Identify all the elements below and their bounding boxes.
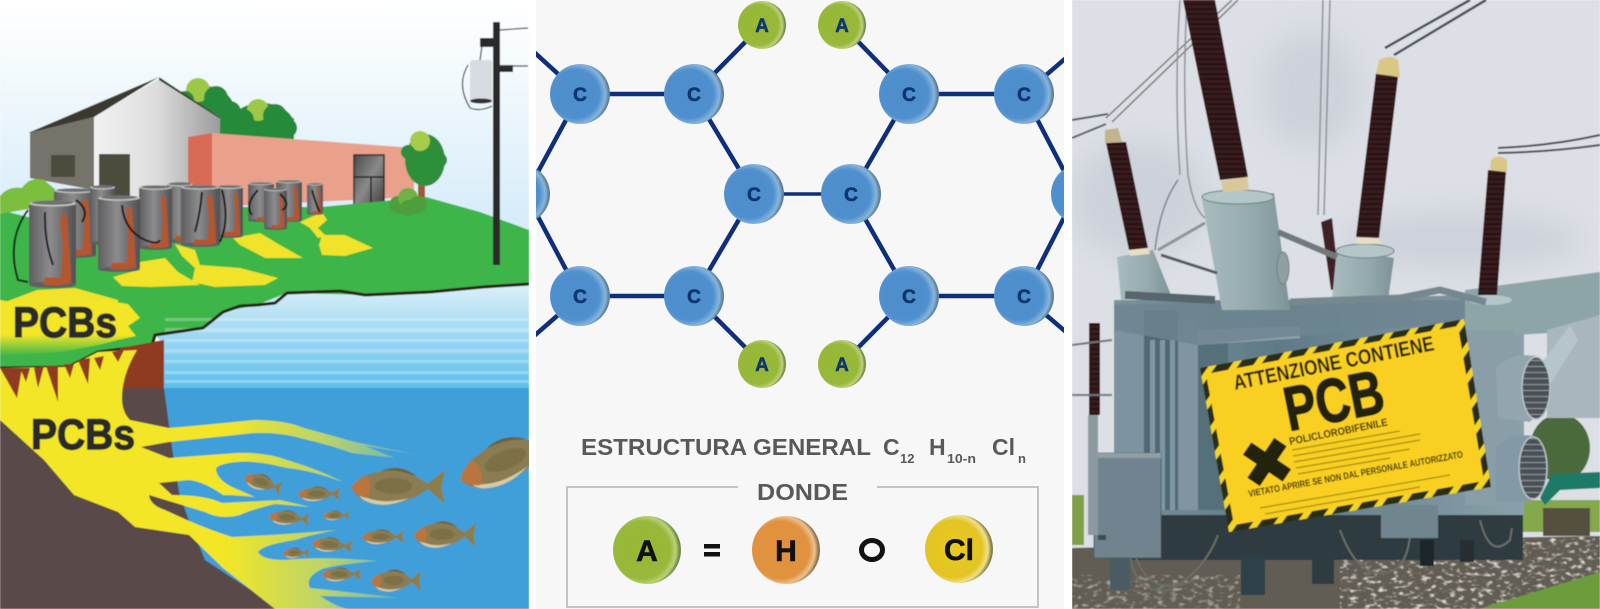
general formula heading bbox=[582, 438, 1026, 463]
general formula heading: Cl bbox=[992, 434, 1015, 460]
carbon atoms: C bbox=[687, 85, 701, 106]
carbon atoms: C bbox=[1017, 85, 1031, 106]
general formula heading: 12 bbox=[900, 451, 914, 466]
panel: transformer photo with warning sign bbox=[1070, 0, 1600, 609]
general formula heading: H bbox=[929, 434, 946, 460]
gravel ground bbox=[1072, 495, 1600, 609]
substituent atoms A bbox=[738, 1, 866, 388]
carbon atoms: C bbox=[902, 287, 916, 308]
pipes and fittings bbox=[1125, 223, 1486, 302]
carbon atoms: C bbox=[1017, 287, 1031, 308]
transformer underside and feet bbox=[1130, 514, 1524, 596]
carbon atoms: C bbox=[747, 185, 761, 206]
utility pole with transformer bbox=[462, 22, 528, 265]
grass strip bbox=[1479, 572, 1600, 609]
right tree bbox=[401, 131, 447, 198]
pink building bbox=[188, 133, 414, 207]
sign fine print bbox=[1260, 431, 1450, 514]
panel: molecular structure diagram bbox=[536, 1, 1064, 608]
substituent atoms A: A bbox=[835, 16, 849, 37]
bushing caps bbox=[1105, 57, 1507, 256]
substituent atoms A: A bbox=[755, 355, 769, 376]
water surface with stripes bbox=[155, 284, 529, 388]
tree behind bbox=[1530, 414, 1590, 482]
sign main label PCB: PCB bbox=[1278, 357, 1390, 445]
sign heading: ATTENZIONE CONTIENE bbox=[1231, 332, 1436, 395]
carbon atoms: C bbox=[687, 287, 701, 308]
warning sign bbox=[1200, 319, 1491, 532]
left insulator post bbox=[1072, 323, 1112, 535]
yellow PCB underground plume bbox=[0, 350, 419, 609]
riverbank and soil bbox=[0, 340, 280, 609]
porcelain bushings bbox=[1106, 0, 1506, 295]
yellow spills on grass bbox=[0, 212, 373, 310]
legend atoms: Cl bbox=[944, 534, 974, 567]
transformer tanks with rust bbox=[29, 180, 323, 288]
icon: hazard X bbox=[1241, 436, 1293, 488]
overhead wires bbox=[1072, 0, 1600, 250]
carbon atoms: C bbox=[573, 85, 587, 106]
cloudy sky bbox=[1072, 0, 1600, 609]
yellow PCB patch in the soil bbox=[0, 300, 140, 356]
panel: PCB contamination illustration bbox=[0, 21, 529, 609]
school of fish bbox=[244, 436, 529, 592]
sign subtitle: POLICLOROBIFENILE bbox=[1288, 417, 1389, 448]
fan radiators bbox=[1496, 325, 1578, 502]
shrub left bbox=[0, 179, 56, 214]
general formula heading: n bbox=[1018, 451, 1026, 466]
general formula heading: ESTRUCTURA GENERAL bbox=[581, 434, 871, 460]
carbon atoms bbox=[536, 64, 1064, 326]
deep water bbox=[164, 388, 529, 609]
carbon atoms: C bbox=[844, 185, 858, 206]
shrub right bbox=[389, 188, 427, 216]
tank cables bbox=[14, 190, 320, 282]
label: PCBs on land: PCBs bbox=[13, 299, 117, 347]
bonds bbox=[536, 40, 1064, 349]
general formula heading: C bbox=[883, 434, 900, 460]
substituent atoms A: A bbox=[755, 16, 769, 37]
grassy ground bbox=[0, 197, 529, 368]
legend atoms: A bbox=[636, 535, 658, 568]
turrets bbox=[1117, 190, 1512, 310]
dark roots in soil bbox=[0, 350, 124, 402]
transformer main body bbox=[1114, 272, 1600, 538]
sky background bbox=[0, 21, 529, 293]
carbon atoms: C bbox=[902, 85, 916, 106]
background grass bbox=[1510, 500, 1600, 532]
green kiosk bbox=[1540, 472, 1600, 536]
general formula heading: 10-n bbox=[947, 451, 976, 466]
label: PCBs underground: PCBs bbox=[31, 411, 135, 459]
control cabinet bbox=[1094, 453, 1161, 590]
legend atoms: H bbox=[775, 535, 797, 568]
shoreline bbox=[0, 284, 529, 368]
legend box bbox=[567, 487, 1038, 607]
barn building bbox=[28, 77, 221, 205]
substituent atoms A: A bbox=[835, 355, 849, 376]
legend atoms bbox=[613, 515, 993, 584]
trees behind the building bbox=[180, 77, 298, 140]
legend title: DONDE bbox=[757, 479, 848, 505]
carbon atoms: C bbox=[573, 287, 587, 308]
sign warning line: VIETATO APRIRE SE NON DAL PERSONALE AUTORIZZATO bbox=[1248, 449, 1464, 500]
